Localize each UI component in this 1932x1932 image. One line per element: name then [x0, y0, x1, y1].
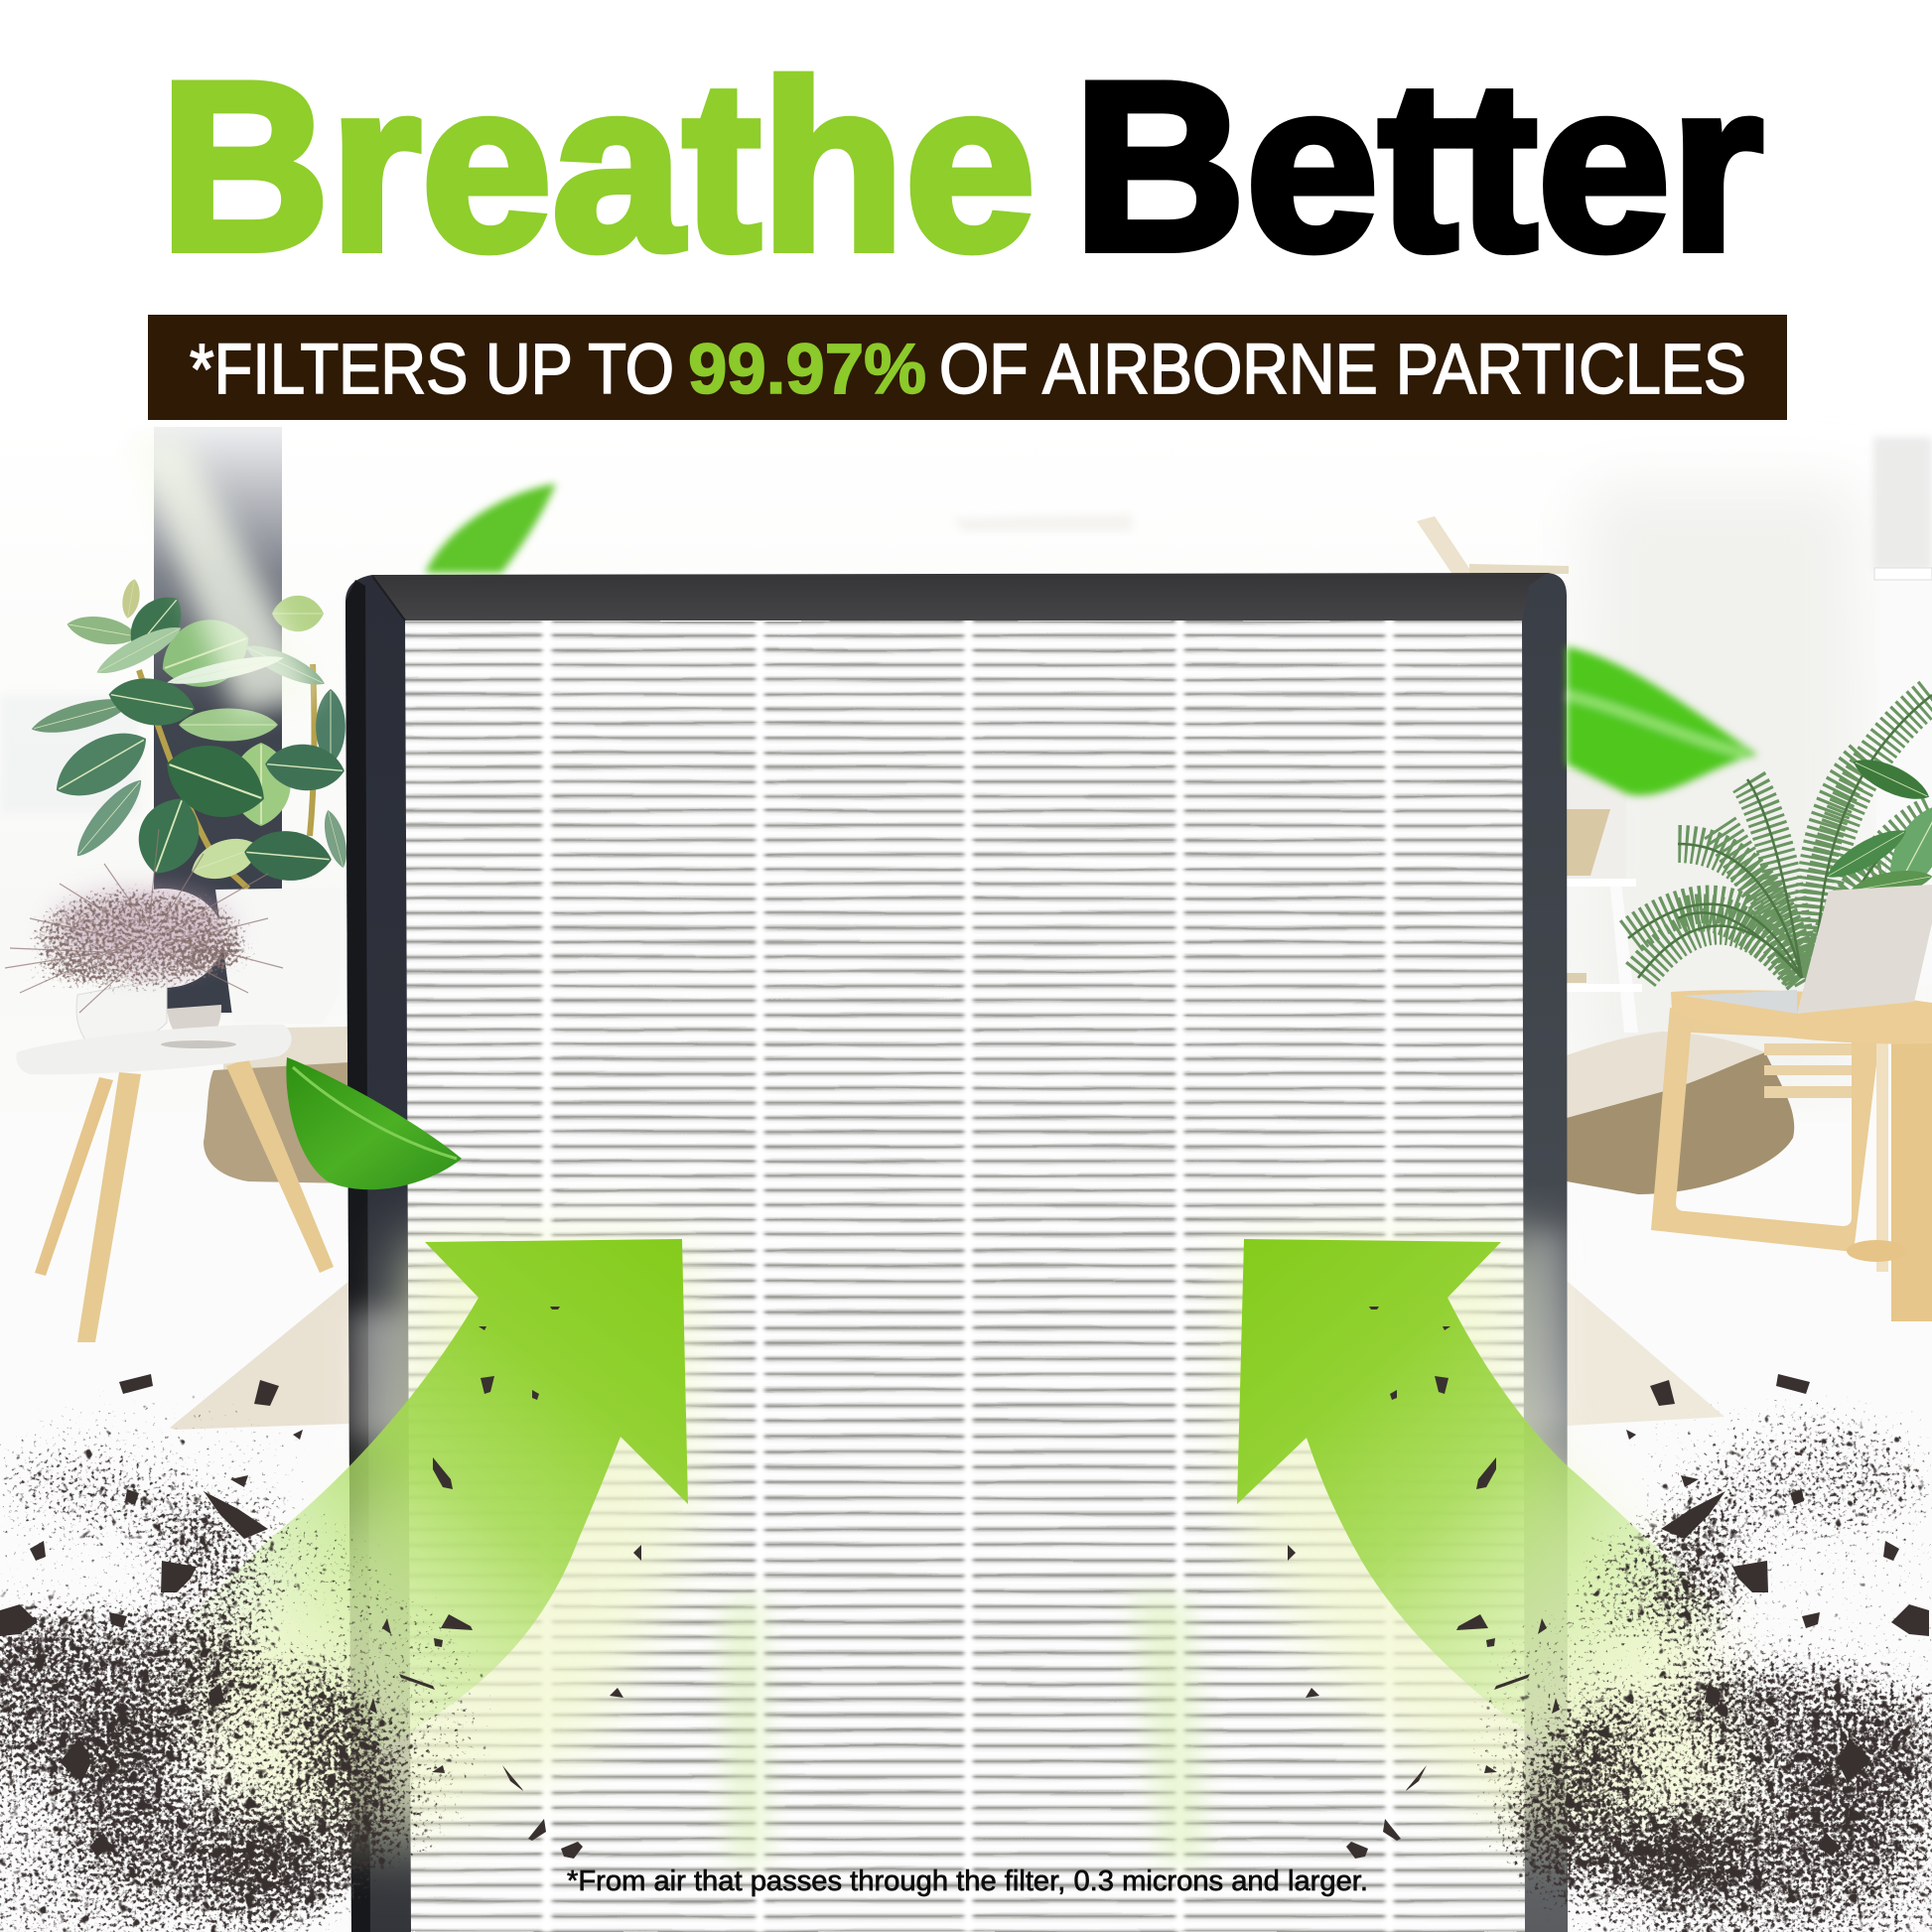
green leaf in front of filter: [286, 1057, 462, 1189]
title: [160, 33, 1763, 301]
peace lily leaves: [1821, 750, 1932, 902]
far-right shelf: [1873, 437, 1932, 985]
dust chunks, left side: [0, 1307, 641, 1859]
filter dark frame: [345, 573, 1568, 1932]
left rug: [170, 1281, 349, 1430]
laptop: [1683, 885, 1932, 1014]
right pouf: [1567, 1032, 1794, 1194]
dust chunks, right side: [1288, 1307, 1929, 1859]
dust clouds: [0, 1380, 1932, 1932]
blurred flying leaf behind top of filter: [425, 483, 556, 573]
pale glow around air flow: [179, 1241, 1747, 1866]
banner text end: OF AIRBORNE PARTICLES: [939, 331, 1746, 409]
heather flowers: [0, 829, 283, 1013]
left pouf: [204, 1027, 349, 1183]
title word: Breathe: Breathe: [160, 33, 1035, 301]
white plant pot: [215, 888, 340, 1024]
filter pleated media: [401, 616, 1527, 1932]
window column: [154, 427, 282, 1013]
right green arrow: [1237, 1239, 1727, 1787]
side table: [16, 1025, 334, 1342]
table top: [16, 1025, 292, 1074]
wooden table: [1651, 990, 1932, 1321]
banner text start: *FILTERS UP TO: [190, 331, 674, 409]
left room scene: plant, table, pouf and rug: [0, 427, 352, 1430]
banner: [148, 315, 1787, 420]
blurred flying leaf right of filter: [1567, 646, 1757, 795]
palm plant: [1628, 695, 1932, 978]
left green arrow: [169, 1239, 688, 1787]
ladder shelf with books: [1417, 516, 1642, 1033]
rubber plant: [29, 578, 352, 889]
title word: Better: Better: [1073, 33, 1763, 301]
table legs: [35, 1058, 334, 1342]
right rug: [1567, 1281, 1725, 1426]
right room scene: shelf, palm, table, laptop and pouf: [1417, 437, 1932, 1426]
vase and cup: [76, 978, 221, 1044]
window-light ray: [129, 437, 318, 715]
banner percentage: 99.97%: [688, 331, 926, 409]
footnote: *From air that passes through the filter, 0.3 microns and larger.: [567, 1865, 1368, 1897]
heather pale backing: [104, 889, 223, 988]
